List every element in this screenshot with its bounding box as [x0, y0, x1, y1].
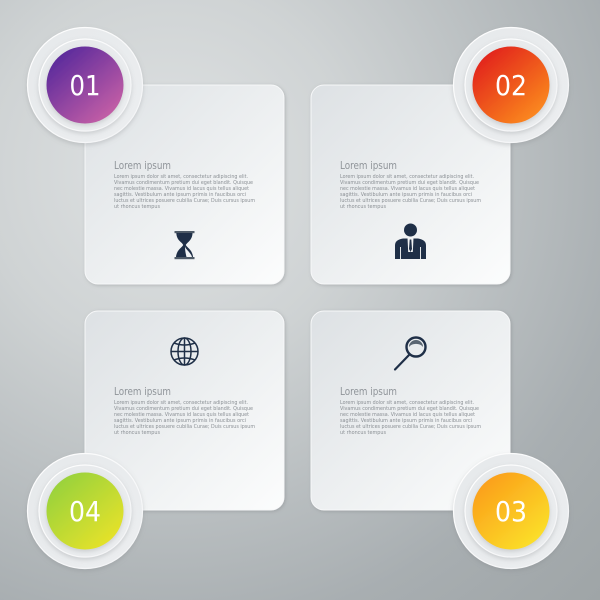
- card 2 body text: [340, 174, 481, 210]
- card 2 heading: Lorem ipsum: [340, 160, 397, 172]
- card 1 body text: Lorem ipsum dolor sit amet, consectetur adipiscing elit.: [114, 174, 248, 180]
- card 1 body text: nec molestie massa. Vivamus id lacus quis tellus aliquet: [114, 186, 250, 192]
- icon: magnifying glass: [395, 338, 426, 370]
- panel: card 1: [85, 85, 284, 284]
- card 2 body text: ut rhoncus tempus: [340, 204, 386, 210]
- card 3 body text: luctus et ultrices posuere cubilia Curae; Duis cursus ipsum: [340, 424, 481, 430]
- card 4 body text: sagittis. Vestibulum ante ipsum primis in faucibus orci: [114, 418, 246, 424]
- number 02: 02: [495, 70, 527, 102]
- card 1 body text: luctus et ultrices posuere cubilia Curae; Duis cursus ipsum: [114, 198, 255, 204]
- card 3 body text: ut rhoncus tempus: [340, 430, 386, 436]
- card 1 body text: sagittis. Vestibulum ante ipsum primis in faucibus orci: [114, 192, 246, 198]
- card 3 body text: Vivamus condimentum pretium dui eget blandit. Quisque: [340, 406, 480, 412]
- panel: card 3: [311, 311, 510, 510]
- icon: globe: [171, 338, 198, 365]
- card 2 body text: nec molestie massa. Vivamus id lacus quis tellus aliquet: [340, 186, 476, 192]
- icon: businessman: [395, 224, 426, 259]
- card 1 heading: Lorem ipsum: [114, 160, 171, 172]
- badge 03: [454, 454, 568, 568]
- icon: hourglass: [174, 231, 194, 259]
- card 4 body text: ut rhoncus tempus: [114, 430, 160, 436]
- card 4 body text: [114, 400, 255, 436]
- number 04: 04: [69, 496, 101, 528]
- card 2 body text: Vivamus condimentum pretium dui eget blandit. Quisque: [340, 180, 480, 186]
- card 1 body text: Vivamus condimentum pretium dui eget blandit. Quisque: [114, 180, 254, 186]
- card 1 body text: [114, 174, 255, 210]
- badge 04: [28, 454, 142, 568]
- badge 02: [454, 28, 568, 142]
- card 4 body text: luctus et ultrices posuere cubilia Curae; Duis cursus ipsum: [114, 424, 255, 430]
- card 1 body text: ut rhoncus tempus: [114, 204, 160, 210]
- badge 01: [28, 28, 142, 142]
- card 3 body text: Lorem ipsum dolor sit amet, consectetur adipiscing elit.: [340, 400, 474, 406]
- panel: card 4: [85, 311, 284, 510]
- panel: card 2: [311, 85, 510, 284]
- card 2 body text: sagittis. Vestibulum ante ipsum primis in faucibus orci: [340, 192, 472, 198]
- card 2 body text: luctus et ultrices posuere cubilia Curae; Duis cursus ipsum: [340, 198, 481, 204]
- card 3 heading: Lorem ipsum: [340, 386, 397, 398]
- card 4 heading: Lorem ipsum: [114, 386, 171, 398]
- card 3 body text: nec molestie massa. Vivamus id lacus quis tellus aliquet: [340, 412, 476, 418]
- card 4 body text: Vivamus condimentum pretium dui eget blandit. Quisque: [114, 406, 254, 412]
- number 01: 01: [70, 70, 100, 102]
- card 3 body text: sagittis. Vestibulum ante ipsum primis in faucibus orci: [340, 418, 472, 424]
- card 4 body text: Lorem ipsum dolor sit amet, consectetur adipiscing elit.: [114, 400, 248, 406]
- number 03: 03: [495, 496, 527, 528]
- card 2 body text: Lorem ipsum dolor sit amet, consectetur adipiscing elit.: [340, 174, 474, 180]
- card 4 body text: nec molestie massa. Vivamus id lacus quis tellus aliquet: [114, 412, 250, 418]
- card 3 body text: [340, 400, 481, 436]
